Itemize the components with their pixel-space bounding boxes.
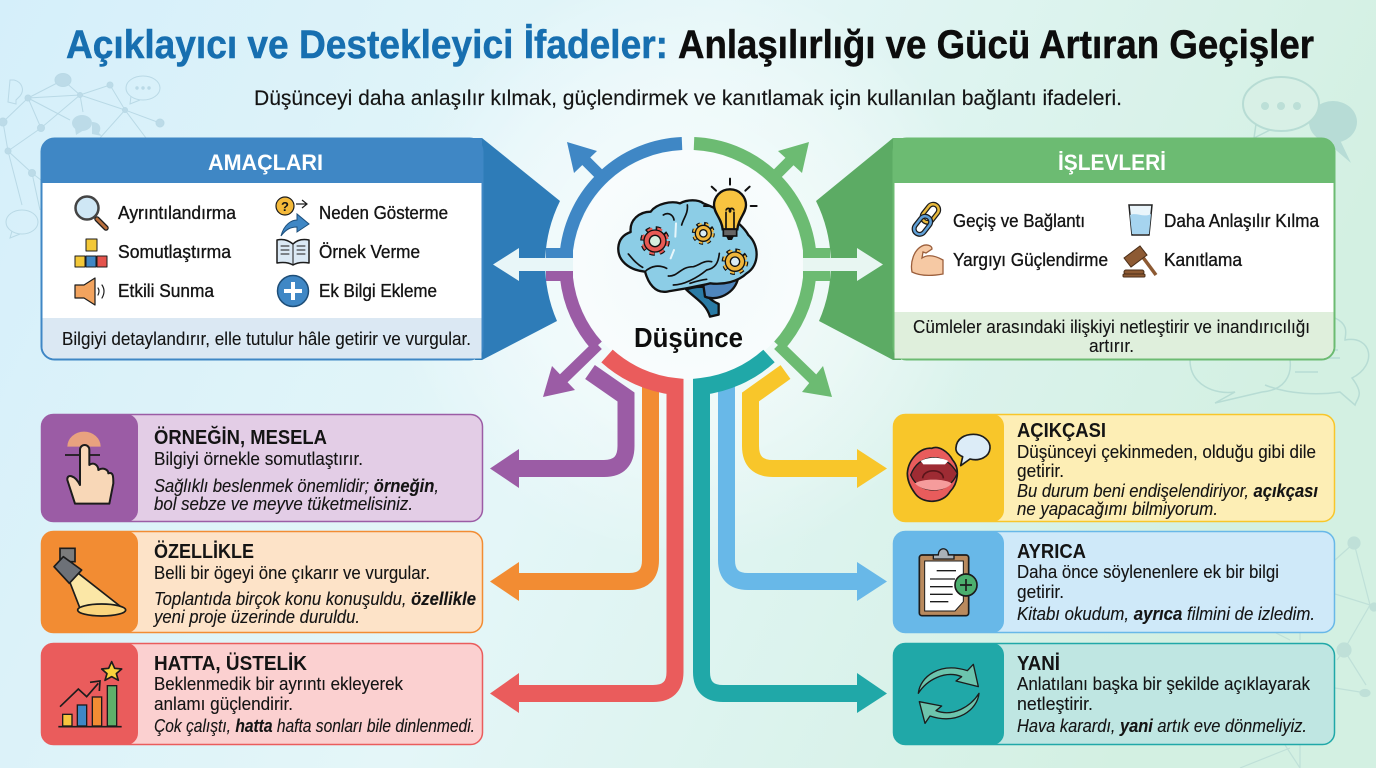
card description — [1017, 673, 1311, 714]
icon: flexed arm — [911, 245, 943, 275]
background speech bubbles top right — [1243, 77, 1357, 163]
card example: Hava karardı, yani artık eve dönmeliyiz. — [1017, 716, 1307, 736]
card title: ÖZELLİKLE — [154, 540, 254, 563]
arrow: light band to amaçları — [493, 248, 573, 281]
icon tile: yellow — [893, 414, 1004, 522]
card title: AÇIKÇASI — [1017, 419, 1106, 442]
panel footer: işlevleri — [894, 312, 1334, 358]
hub disc — [573, 150, 803, 380]
icon: refresh arrows — [918, 664, 979, 723]
card title: HATTA, ÜSTELİK — [154, 652, 307, 675]
item: örnek verme: Örnek Verme — [319, 241, 420, 262]
icon: question and arrow — [276, 197, 309, 236]
arrow: hatta — [490, 356, 675, 713]
item: ayrıntılandırma: Ayrıntılandırma — [118, 202, 237, 223]
item: yargıyı güçlendirme: Yargıyı Güçlendirme — [953, 249, 1108, 270]
panel footer: amaçları — [42, 318, 482, 358]
item: neden gösterme: Neden Gösterme — [319, 202, 448, 223]
card example — [152, 589, 476, 627]
icon: magnifier — [76, 196, 106, 228]
arrow: light band to işlevleri — [803, 248, 883, 281]
card example: bol sebze ve meyve tüketmelisiniz. — [154, 494, 413, 514]
card: hatta, üstelik — [41, 643, 482, 745]
title: Anlaşılırlığı ve Gücü Artıran Geçişler — [678, 23, 1314, 67]
arrow: blue ring to amaçları — [546, 142, 682, 258]
card description: anlamı güçlendirir. — [154, 693, 293, 714]
icon: growth chart — [58, 662, 122, 727]
panel header: amaçları — [41, 138, 482, 183]
card description: Anlatılanı başka bir şekilde açıklayarak — [1017, 673, 1311, 694]
hub label: Düşünce — [634, 322, 743, 353]
icon tile: purple — [41, 414, 138, 522]
card: özellikle — [41, 531, 482, 633]
card title: YANİ — [1017, 652, 1060, 675]
card: ayrıca — [893, 531, 1334, 633]
icon: blocks — [75, 239, 107, 267]
arrow: özellikle — [490, 385, 650, 601]
icon: speaker — [75, 278, 104, 305]
icon: tapping hand — [65, 432, 113, 504]
card description: Düşünceyi çekinmeden, olduğu gibi dile — [1017, 441, 1316, 462]
item: geçiş ve bağlantı: Geçiş ve Bağlantı — [953, 210, 1085, 231]
icon tile: red — [41, 643, 138, 745]
card description: Bilgiyi örnekle somutlaştırır. — [154, 448, 363, 469]
item: ek bilgi ekleme: Ek Bilgi Ekleme — [319, 280, 437, 301]
card: açıkçası — [893, 414, 1334, 522]
card description: netleştirir. — [1017, 693, 1093, 714]
icon tile: light blue — [893, 531, 1004, 633]
arrow: açıkçası — [750, 372, 887, 488]
background speech bubbles lower right — [1190, 318, 1369, 405]
panel footer: amaçları: Bilgiyi detaylandırır, elle tutulur hâle getirir ve vurgular. — [62, 328, 471, 349]
connector wedge: işlevleri — [816, 138, 901, 360]
card description — [1017, 561, 1279, 602]
panel: işlevleri — [893, 138, 1335, 360]
icon: open book — [277, 239, 309, 265]
background network top left — [0, 74, 164, 238]
card title: ÖRNEĞİN, MESELA — [154, 425, 327, 449]
card: yani — [893, 643, 1334, 745]
arrow: purple ring branch — [543, 271, 598, 397]
panel footer: işlevleri: artırır. — [1089, 335, 1134, 356]
card example: Toplantıda birçok konu konuşuldu, özellikle — [154, 589, 476, 609]
card example: Çok çalıştı, hatta hafta sonları bile dinlenmedi. — [154, 716, 475, 736]
background network lower right — [1240, 537, 1376, 768]
card description — [154, 673, 404, 714]
panel header: işlevleri: İŞLEVLERİ — [1058, 150, 1166, 175]
panel footer: işlevleri: Cümleler arasındaki ilişkiyi netleştirir ve inandırıcılığı — [913, 316, 1310, 337]
arrow: yani — [702, 356, 887, 713]
card example — [154, 476, 439, 514]
card example: Bu durum beni endişelendiriyor, açıkçası — [1017, 481, 1318, 501]
panel header: amaçları: AMAÇLARI — [208, 150, 323, 175]
arrow: örneğin — [490, 372, 626, 488]
item: etkili sunma: Etkili Sunma — [118, 280, 215, 301]
icon: chain link — [912, 202, 941, 237]
card example — [1017, 481, 1318, 519]
arrow: ayrıca — [726, 385, 887, 601]
icon: spotlight — [54, 548, 126, 616]
icon: question and arrow: ? — [281, 199, 289, 214]
subtitle: Düşünceyi daha anlaşılır kılmak, güçlendirmek ve kanıtlamak için kullanılan bağlantı ifadeleri. — [254, 86, 1122, 110]
card example: Kitabı okudum, ayrıca filmini de izledim. — [1017, 604, 1315, 624]
card: örneğin, mesela — [41, 414, 482, 522]
background glow — [388, 0, 988, 565]
icon tile: orange — [41, 531, 138, 633]
card example: ne yapacağımı bilmiyorum. — [1017, 499, 1218, 519]
item: daha anlaşılır kılma: Daha Anlaşılır Kılma — [1164, 210, 1320, 231]
item: kanıtlama: Kanıtlama — [1164, 249, 1243, 270]
card description: Belli bir ögeyi öne çıkarır ve vurgular. — [154, 562, 430, 583]
card description: Beklenmedik bir ayrıntı ekleyerek — [154, 673, 404, 694]
panel header: işlevleri — [893, 138, 1335, 183]
icon: gavel — [1123, 246, 1156, 277]
item: somutlaştırma: Somutlaştırma — [118, 241, 232, 262]
card title: AYRICA — [1017, 540, 1086, 563]
card description: getirir. — [1017, 460, 1064, 481]
panel: amaçları — [41, 138, 482, 360]
card example: yeni proje üzerinde duruldu. — [152, 607, 360, 627]
connector wedge: amaçları — [475, 138, 560, 360]
title — [66, 23, 1314, 67]
icon tile: teal — [893, 643, 1004, 745]
card example: Sağlıklı beslenmek önemlidir; örneğin, — [154, 476, 439, 496]
card description — [1017, 441, 1316, 481]
arrow: green ring to işlevleri — [694, 142, 832, 397]
icon: open mouth with speech bubble — [907, 434, 990, 501]
icon: plus — [278, 276, 308, 306]
icon: brain with gears and bulb — [618, 179, 757, 317]
card description: Daha önce söylenenlere ek bir bilgi — [1017, 561, 1279, 582]
card description: getirir. — [1017, 581, 1064, 602]
icon: clipboard with plus — [919, 549, 977, 616]
icon: glass of water — [1129, 205, 1152, 235]
title: Açıklayıcı ve Destekleyici İfadeler: — [66, 23, 668, 67]
